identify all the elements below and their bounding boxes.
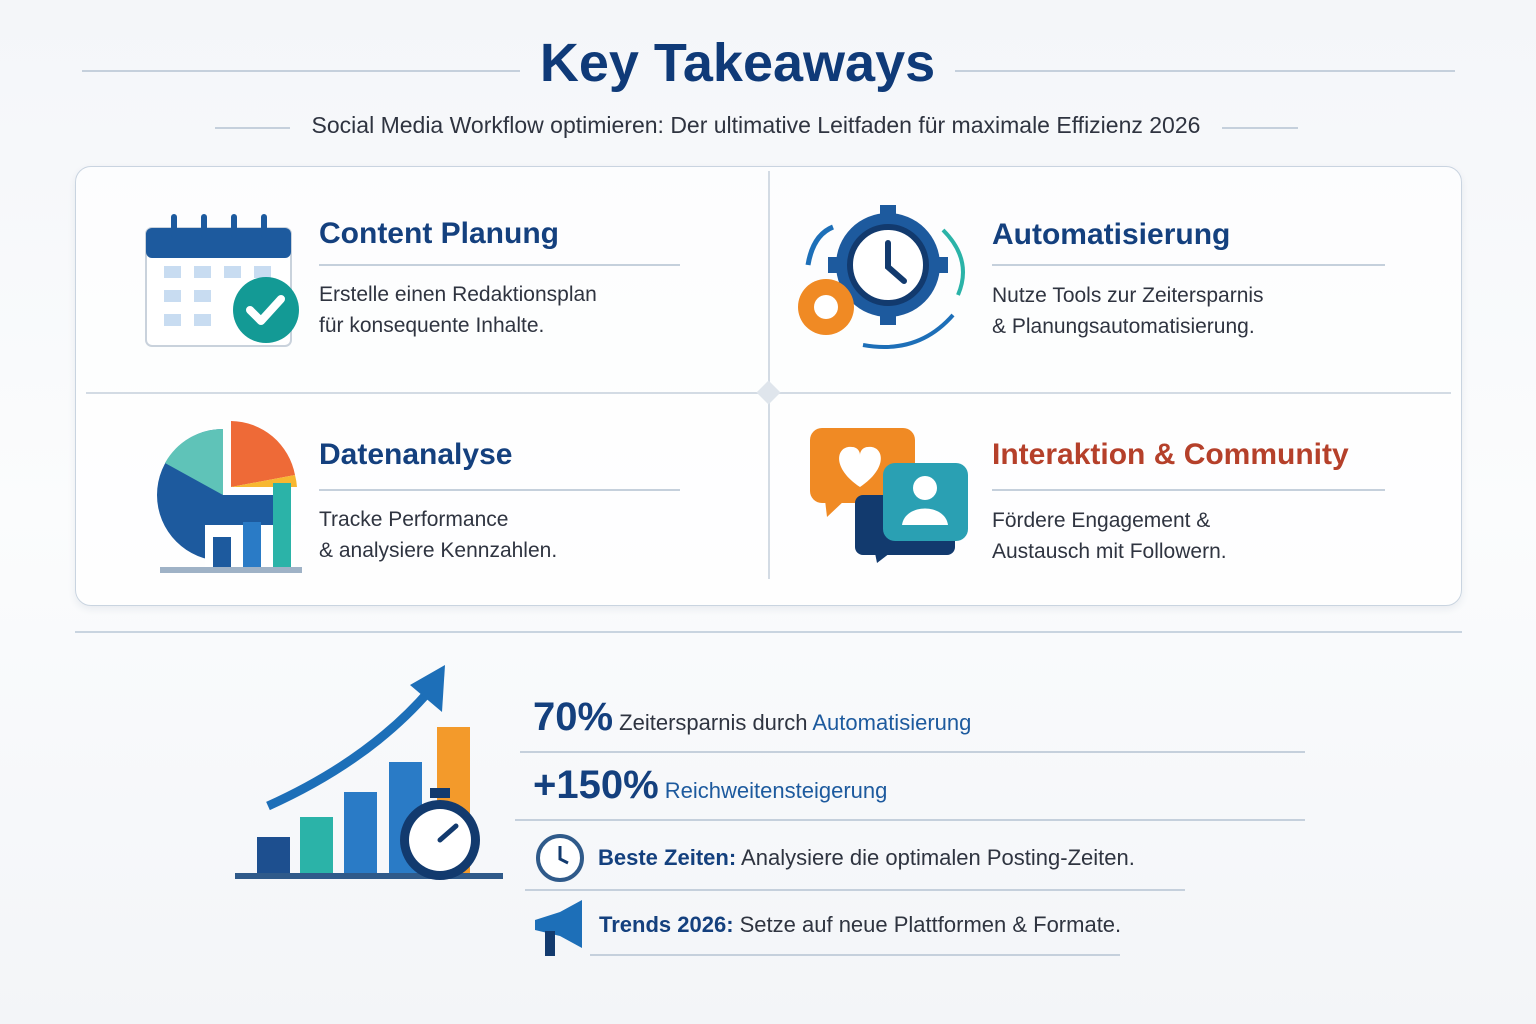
- text: Automatisierung: & Planungsautomatisierung.: [992, 315, 1255, 338]
- heading: Automatisierung: Automatisierung: [992, 218, 1230, 251]
- text: Datenanalyse: & analysiere Kennzahlen.: [319, 539, 557, 562]
- text: Content Planung: Erstelle einen Redaktionsplan: [319, 283, 597, 306]
- heading: Content Planung: Content Planung: [319, 217, 559, 250]
- text: Datenanalyse: Tracke Performance: [319, 508, 508, 531]
- icon: pie chart: [157, 421, 302, 573]
- text: Interaktion: Austausch mit Followern.: [992, 540, 1227, 563]
- icon: chat bubbles: [810, 428, 968, 563]
- panel: takeaways grid: [75, 166, 1462, 606]
- stat: 70%: 70% Zeitersparnis durch Automatisierung: [533, 695, 971, 739]
- stat: +150%: +150% Reichweitensteigerung: [533, 763, 887, 807]
- heading: Datenanalyse: Datenanalyse: [319, 438, 512, 471]
- text: Automatisierung: Nutze Tools zur Zeitersparnis: [992, 284, 1264, 307]
- illustration: growth chart with stopwatch: [235, 665, 503, 880]
- title: Key Takeaways: [540, 33, 935, 93]
- text: Content Planung: [319, 283, 597, 337]
- item: Beste Zeiten: Beste Zeiten: Analysiere die optimalen Posting-Zeiten.: [598, 845, 1135, 870]
- subtitle: Social Media Workflow optimieren: Der ultimative Leitfaden für maximale Effizienz 2026: [312, 112, 1200, 138]
- text: Automatisierung: [992, 284, 1264, 338]
- text: Interaktion: Fördere Engagement &: [992, 509, 1210, 532]
- item: Trends 2026: [535, 900, 1121, 956]
- item: Trends 2026: Trends 2026: Setze auf neue Plattformen & Formate.: [599, 912, 1121, 937]
- item: Beste Zeiten: [536, 834, 1135, 882]
- icon: calendar: [145, 214, 299, 347]
- heading: Interaktion & Community: Interaktion & Community: [992, 438, 1349, 471]
- text: Datenanalyse: [319, 508, 557, 562]
- text: Interaktion: [992, 509, 1227, 563]
- icon: gears & clock: [798, 205, 965, 349]
- text: Content Planung: für konsequente Inhalte.: [319, 314, 544, 337]
